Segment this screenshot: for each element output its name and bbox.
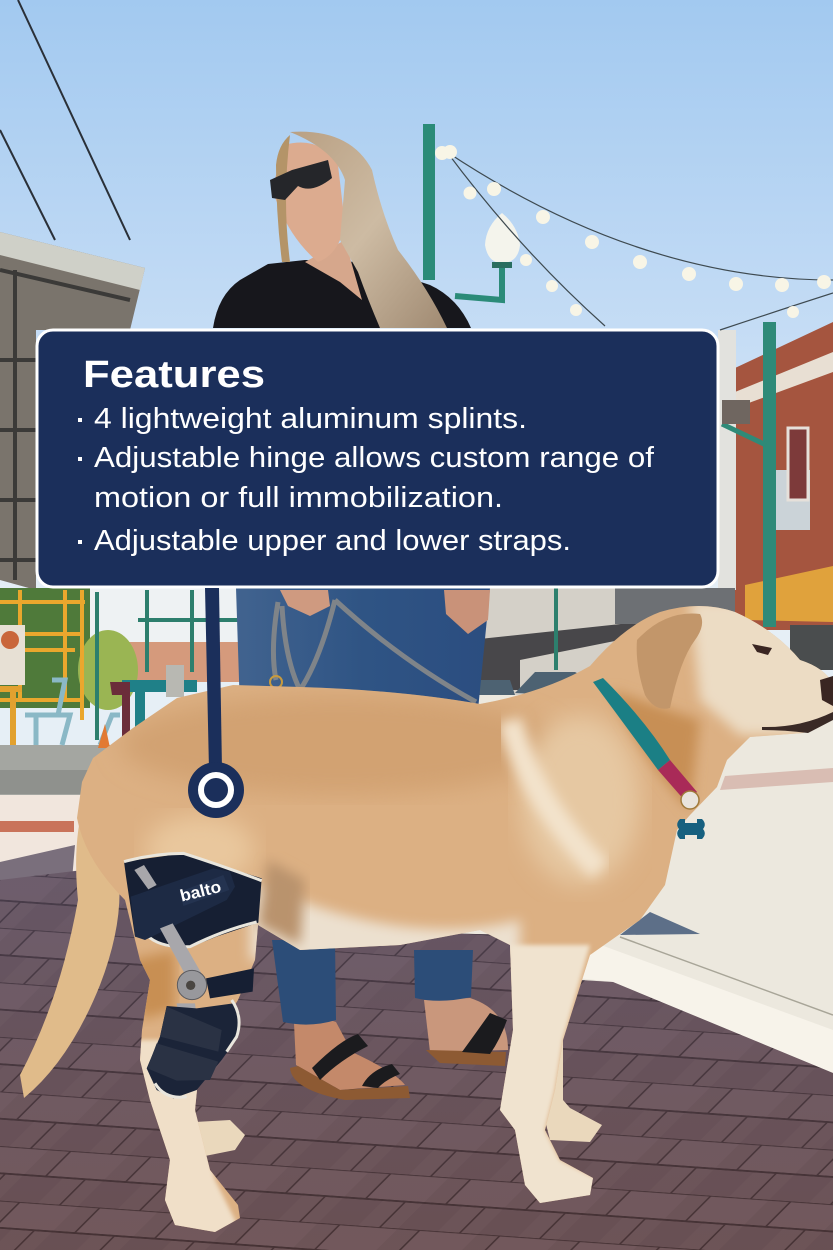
- callout pointer: [188, 588, 244, 818]
- feature list: Adjustable upper and lower straps.: [94, 525, 571, 557]
- feature list: Adjustable hinge allows custom range of: [94, 442, 655, 474]
- dog far legs: [175, 1030, 602, 1156]
- features panel: [37, 330, 718, 587]
- lower straps: [147, 1007, 222, 1081]
- cafe tables and chairs: [0, 665, 197, 748]
- feature list: 4 lightweight aluminum splints.: [94, 403, 527, 435]
- dog body and head: [60, 590, 833, 1250]
- right brick building: [718, 322, 833, 670]
- woman: torso, hair and head: [213, 132, 471, 328]
- woman: lower legs and sandals: [272, 940, 508, 1100]
- upper cuff: [124, 853, 262, 947]
- overhead wires: [0, 0, 130, 240]
- lower cuff: [147, 1003, 240, 1098]
- curb: [560, 930, 833, 1073]
- hinge: [177, 970, 207, 1000]
- collar: [593, 678, 670, 770]
- woman: upper jeans and hands: [236, 588, 490, 710]
- street poles: [97, 588, 556, 740]
- dog ear: [637, 614, 702, 709]
- dog tail: [20, 800, 120, 1098]
- background storefronts: [470, 588, 735, 698]
- dog fur shading: [120, 600, 833, 1240]
- aluminum splints: [134, 865, 203, 1089]
- distant street on left: [0, 588, 240, 795]
- road and pavement: [0, 695, 833, 1095]
- left scaffold and trees: [0, 588, 138, 720]
- sky background: [0, 0, 833, 760]
- street lamp: [423, 124, 520, 300]
- feature list: motion or full immobilization.: [94, 482, 503, 514]
- dog: [20, 590, 833, 1250]
- heading: Features: [83, 354, 265, 396]
- left awning: [0, 232, 145, 590]
- middle strap: [206, 968, 254, 998]
- leash: [270, 600, 476, 702]
- brick pavement: [0, 868, 833, 1250]
- dog eye and nose: [752, 644, 833, 706]
- brace strap: [131, 868, 235, 940]
- string lights: [435, 145, 833, 330]
- knee brace: [124, 853, 262, 1098]
- feature list: [78, 403, 655, 557]
- logo patch: balto: [178, 877, 223, 906]
- green pole right: [722, 322, 776, 627]
- bone tag: [677, 819, 705, 839]
